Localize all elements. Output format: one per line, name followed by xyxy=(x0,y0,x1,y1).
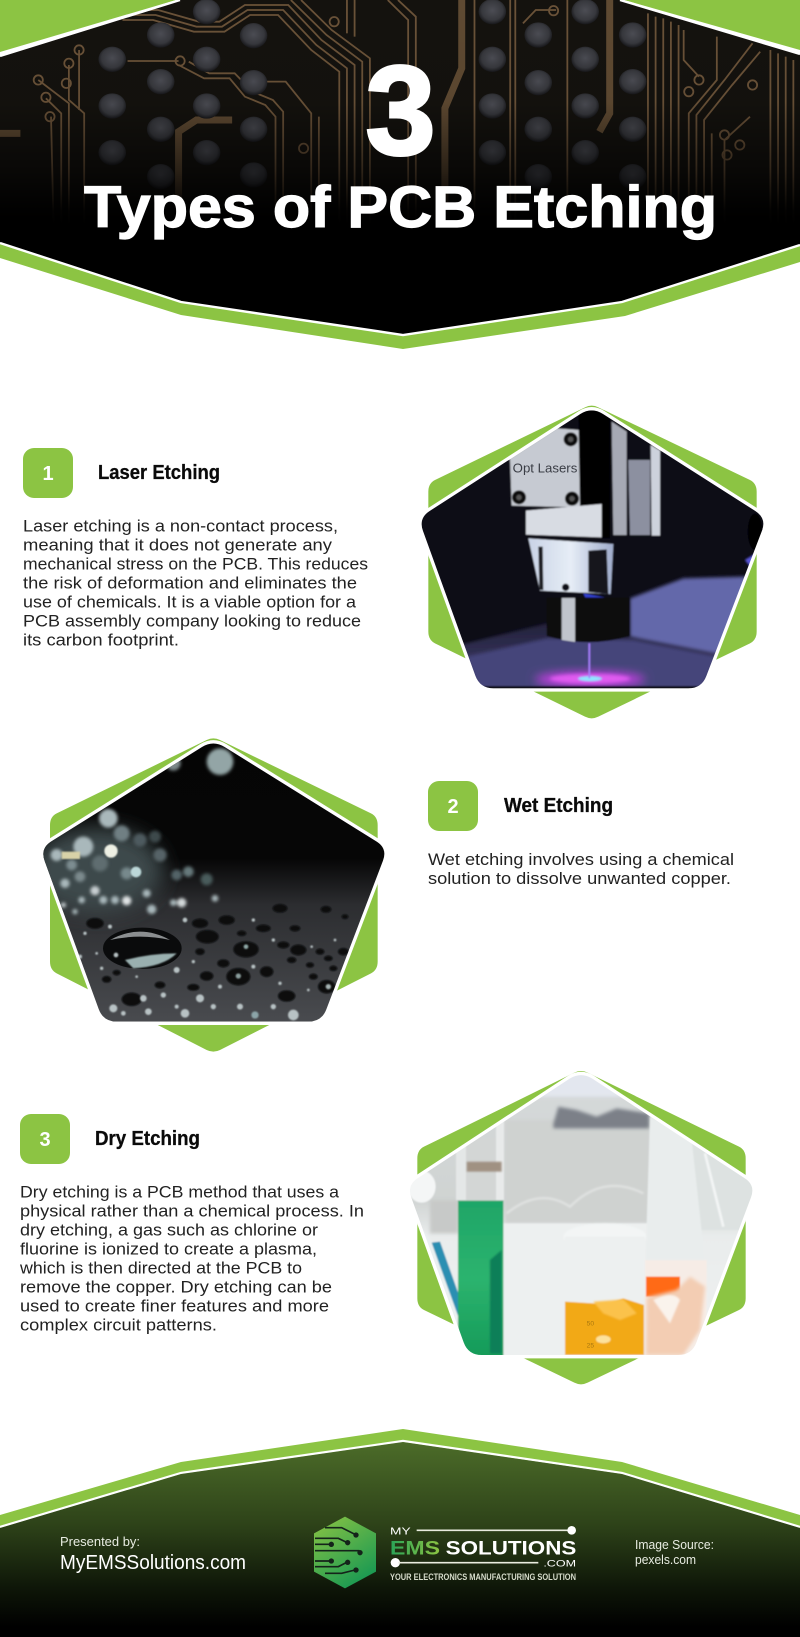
body text: the risk of deformation and eliminates the xyxy=(23,575,357,593)
number badge 2: 2 xyxy=(447,796,459,818)
column xyxy=(578,410,610,538)
white pentagon outline xyxy=(43,743,384,1022)
droplets xyxy=(86,904,349,1006)
logo wordmark: EMS xyxy=(390,1538,440,1559)
body text: Laser etching is a non-contact process, xyxy=(23,518,338,536)
body text: fluorine is ionized to create a plasma, xyxy=(20,1241,317,1259)
green corner left xyxy=(0,0,176,52)
section 1: laser etching text xyxy=(23,448,368,650)
photo: 25 xyxy=(587,1342,594,1349)
number badge 1 xyxy=(23,448,73,498)
photo xyxy=(403,1067,763,1360)
body text: meaning that it does not generate any xyxy=(23,537,333,555)
section 3: dry etching text xyxy=(19,1114,364,1335)
body text: Dry etching is a PCB method that uses a xyxy=(20,1184,340,1202)
photo: Opt Lasers xyxy=(513,460,578,475)
presented by: MyEMSSolutions.com xyxy=(60,1552,246,1574)
photo: 50 xyxy=(587,1320,594,1327)
left white bulb xyxy=(410,1172,436,1203)
white pentagon outline xyxy=(410,1075,752,1355)
image source: Image Source: xyxy=(635,1538,714,1552)
section 2: wet etching text xyxy=(428,781,734,888)
body text: remove the copper. Dry etching can be xyxy=(20,1279,332,1297)
body text: PCB assembly company looking to reduce xyxy=(23,613,361,631)
heading: Laser Etching xyxy=(98,462,220,484)
number badge 3: 3 xyxy=(39,1129,51,1151)
header banner xyxy=(0,0,800,349)
presented by: Presented by: xyxy=(60,1534,140,1549)
body text: dry etching, a gas such as chlorine or xyxy=(20,1222,319,1240)
highlights xyxy=(78,918,336,1020)
number badge 2 xyxy=(428,781,478,831)
logo wordmark: MY xyxy=(390,1526,411,1537)
green hexagon backing xyxy=(428,406,757,718)
footer banner xyxy=(0,1429,800,1637)
heading: Dry Etching xyxy=(95,1128,200,1150)
image: water droplets in pentagon xyxy=(30,737,393,1052)
green hexagon backing xyxy=(50,738,378,1052)
big numeral: 3 xyxy=(365,40,436,181)
green underline band xyxy=(0,243,800,349)
white edge xyxy=(0,1441,800,1527)
body text xyxy=(19,1184,364,1335)
logo wordmark: YOUR ELECTRONICS MANUFACTURING SOLUTION xyxy=(390,1572,576,1582)
logo xyxy=(314,1517,576,1588)
title xyxy=(84,40,717,240)
body text xyxy=(428,851,734,888)
body text: which is then directed at the PCB to xyxy=(19,1260,302,1278)
body text: solution to dissolve unwanted copper. xyxy=(428,870,731,888)
presented by xyxy=(60,1534,246,1574)
logo hexagon xyxy=(314,1517,376,1588)
dark gradient panel xyxy=(0,1442,800,1637)
image source: pexels.com xyxy=(635,1553,696,1567)
logo wordmark xyxy=(390,1526,576,1582)
image: laser engraver head in pentagon xyxy=(413,400,773,718)
white pentagon outline xyxy=(422,410,763,688)
number badge 1: 1 xyxy=(42,463,54,485)
body text: Wet etching involves using a chemical xyxy=(428,851,734,869)
green top band xyxy=(0,1429,800,1530)
beaker fog xyxy=(563,1223,647,1250)
number badge 3 xyxy=(20,1114,70,1164)
image source xyxy=(635,1538,714,1567)
body text: complex circuit patterns. xyxy=(20,1317,217,1335)
circuit board photo xyxy=(0,0,800,340)
title line: Types of PCB Etching xyxy=(84,175,717,240)
green corner right xyxy=(624,0,800,50)
orange liquid xyxy=(565,1298,644,1355)
image: chemistry glassware in pentagon xyxy=(403,1067,763,1384)
body text xyxy=(23,518,368,650)
logo wordmark: .COM xyxy=(543,1558,576,1568)
large drop xyxy=(103,928,182,969)
body text: physical rather than a chemical process. In xyxy=(20,1203,364,1221)
white edge lines xyxy=(0,0,800,335)
plate xyxy=(510,428,580,507)
green hexagon backing xyxy=(417,1071,746,1384)
glow xyxy=(535,672,645,687)
logo wordmark: SOLUTIONS xyxy=(446,1538,576,1559)
body text: its carbon footprint. xyxy=(23,632,179,650)
lens cylinder xyxy=(547,597,630,642)
photo xyxy=(413,400,773,693)
flask xyxy=(646,1118,701,1230)
test tube xyxy=(456,1137,503,1200)
body text: used to create finer features and more xyxy=(20,1298,329,1316)
body text: mechanical stress on the PCB. This reduces xyxy=(23,556,368,574)
mid block xyxy=(526,504,602,537)
photo xyxy=(30,737,393,1027)
body text: use of chemicals. It is a viable option for a xyxy=(23,594,357,612)
heading: Wet Etching xyxy=(504,795,613,817)
